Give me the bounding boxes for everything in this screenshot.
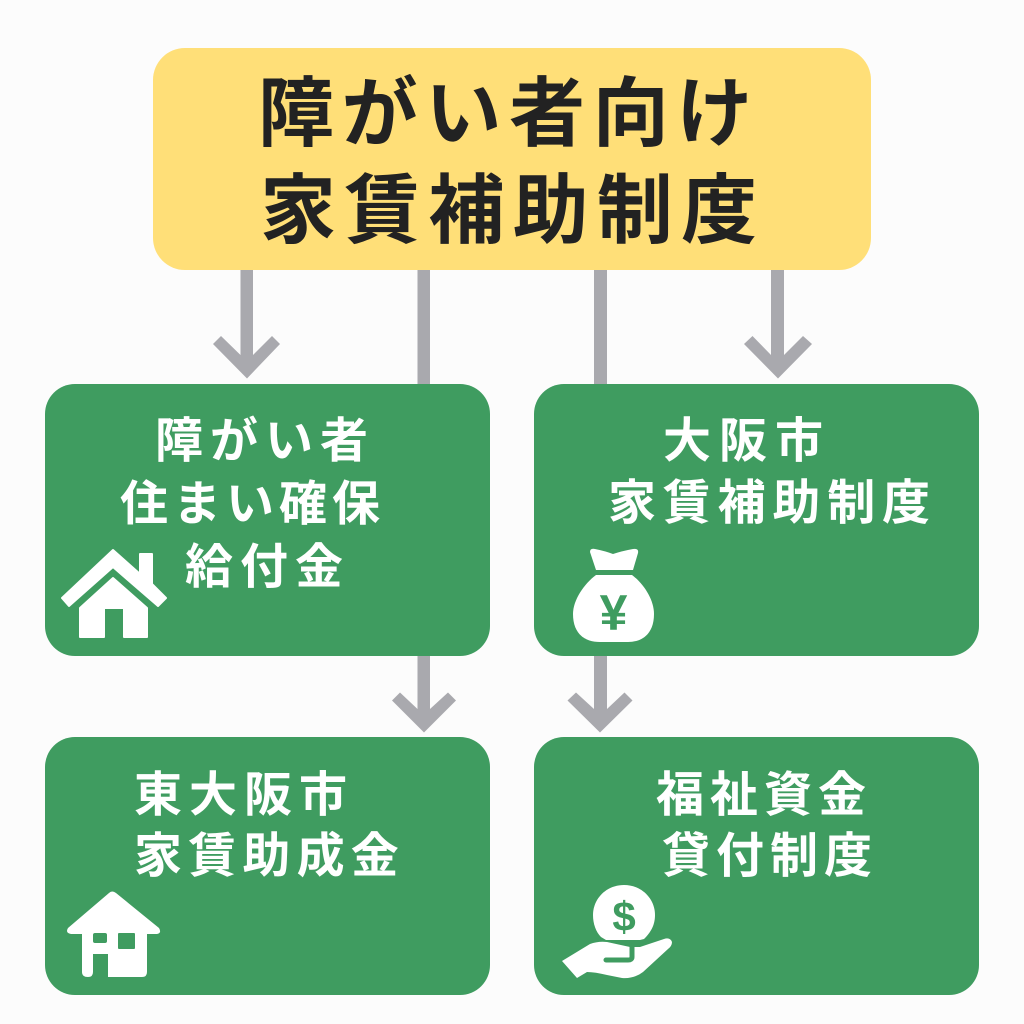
heading line 1: 福祉資金	[656, 769, 872, 822]
icon: money bag with yen: ¥	[600, 585, 628, 641]
panel: 東大阪市家賃助成金	[45, 737, 490, 995]
heading line 2: 住まい確保	[120, 478, 385, 531]
title text line 2: 家賃補助制度	[260, 169, 765, 254]
panel: 障がい者住まい確保給付金	[45, 384, 490, 656]
title text line 1: 障がい者向け	[258, 72, 760, 157]
icon: hand holding coin: $	[612, 893, 636, 940]
panel: 大阪市家賃補助制度	[534, 384, 979, 656]
icon: money bag with yen	[573, 548, 654, 642]
heading line 1: 障がい者	[155, 415, 375, 468]
title panel	[153, 48, 871, 270]
heading line 2: 貸付制度	[662, 830, 878, 883]
icon: house	[61, 549, 167, 638]
heading line 2: 家賃助成金	[134, 830, 405, 883]
heading line 2: 家賃補助制度	[608, 477, 937, 530]
icon: hand holding coin	[562, 885, 672, 978]
heading line 1: 東大阪市	[134, 769, 354, 822]
heading line 3: 給付金	[185, 541, 350, 594]
icon: small house	[67, 892, 160, 977]
heading line 1: 大阪市	[663, 415, 831, 468]
panel: 福祉資金貸付制度	[534, 737, 979, 995]
